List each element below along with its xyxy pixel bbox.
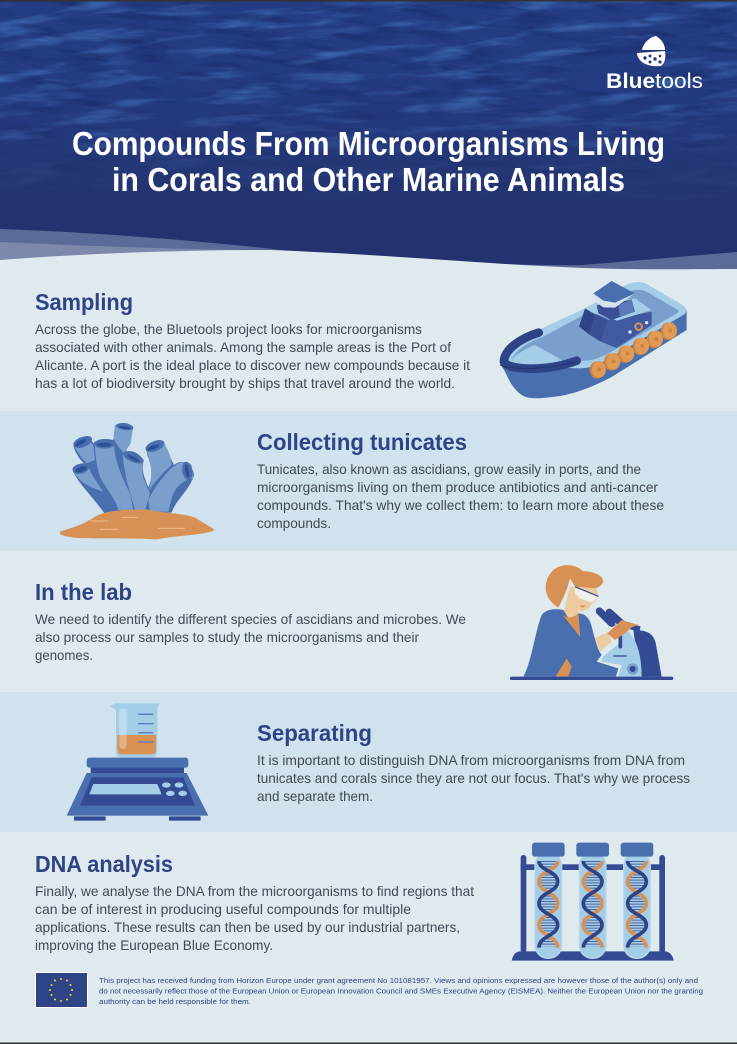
heading: sampling: Sampling xyxy=(35,289,133,315)
title xyxy=(72,125,665,198)
text block: collecting tunicates: microorganisms living on them produce antibiotics and anti-cancer xyxy=(257,480,658,495)
text block: DNA analysis: Finally, we analyse the DNA from the microorganisms to find regions that xyxy=(35,884,474,899)
text block: funding disclaimer: This project has received funding from Horizon Europe under grant agreement No 101081957. Views and opinions expressed are however those of the author(s) only and xyxy=(99,976,698,985)
logo: Bluetools: Bluetools xyxy=(606,70,703,93)
footer: EU funding notice xyxy=(35,972,703,1008)
panel: sampling xyxy=(35,281,687,398)
text block: separating: It is important to distinguish DNA from microorganisms from DNA from xyxy=(257,753,685,768)
text block: funding disclaimer: authority can be held responsible for them. xyxy=(99,997,251,1006)
text block: DNA analysis: applications. These results can then be used by our industrial partners, xyxy=(35,920,460,935)
panel: collecting tunicates xyxy=(0,411,737,551)
heading: DNA analysis: DNA analysis xyxy=(35,851,173,877)
text block: in the lab xyxy=(35,612,466,663)
text block: collecting tunicates: compounds. xyxy=(257,516,331,531)
text block: funding disclaimer xyxy=(99,976,703,1006)
heading: in the lab: In the lab xyxy=(35,579,132,605)
text block: sampling: Across the globe, the Bluetools project looks for microorganisms xyxy=(35,322,422,337)
text block: collecting tunicates xyxy=(257,462,664,531)
text block: sampling: has a lot of biodiversity brought by ships that travel around the world. xyxy=(35,376,455,391)
text block: in the lab: genomes. xyxy=(35,648,93,663)
icon: boat xyxy=(500,281,687,398)
icon: scientist at microscope xyxy=(510,565,673,680)
icon: tunicate coral on sand xyxy=(60,422,214,539)
panel: DNA analysis xyxy=(35,843,674,961)
header: sea photo banner xyxy=(0,0,737,270)
text block: sampling xyxy=(35,322,470,391)
panel: in the lab xyxy=(35,565,673,680)
title: Compounds From Microorganisms Living xyxy=(72,125,665,162)
icon: DNA test tubes in rack xyxy=(512,843,674,961)
text block: sampling: Alicante. A port is the ideal place to discover new compounds because it xyxy=(35,358,470,373)
icon: EU flag xyxy=(35,972,88,1008)
text block: in the lab: also process our samples to study the microorganisms and their xyxy=(35,630,419,645)
text block: in the lab: We need to identify the different species of ascidians and microbes. We xyxy=(35,612,466,627)
icon: beaker on scale xyxy=(67,703,208,821)
heading: collecting tunicates: Collecting tunicates xyxy=(257,429,467,455)
logo: Bluetools xyxy=(606,36,703,93)
text block: separating: tunicates and corals since they are not our focus. That's why we process xyxy=(257,771,690,786)
text block: DNA analysis xyxy=(35,884,474,953)
text block: collecting tunicates: Tunicates, also known as ascidians, grow easily in ports, and the xyxy=(257,462,641,477)
heading: separating: Separating xyxy=(257,720,372,746)
text block: DNA analysis: can be of interest in producing useful compounds for multiple xyxy=(35,902,411,917)
text block: separating: and separate them. xyxy=(257,789,373,804)
panel: separating xyxy=(0,692,737,832)
title: in Corals and Other Marine Animals xyxy=(112,161,625,198)
text block: DNA analysis: improving the European Blue Economy. xyxy=(35,938,273,953)
text block: separating xyxy=(257,753,690,804)
text block: funding disclaimer: do not necessarily reflect those of the European Union or European Innovation Council and SMEs Executive Agency (EISMEA). Neither the European Union nor the granting xyxy=(99,986,703,996)
text block: collecting tunicates: compounds. That's why we collect them: to learn more about these xyxy=(257,498,664,513)
text block: sampling: associated with other animals. Among the sample areas is the Port of xyxy=(35,340,451,355)
